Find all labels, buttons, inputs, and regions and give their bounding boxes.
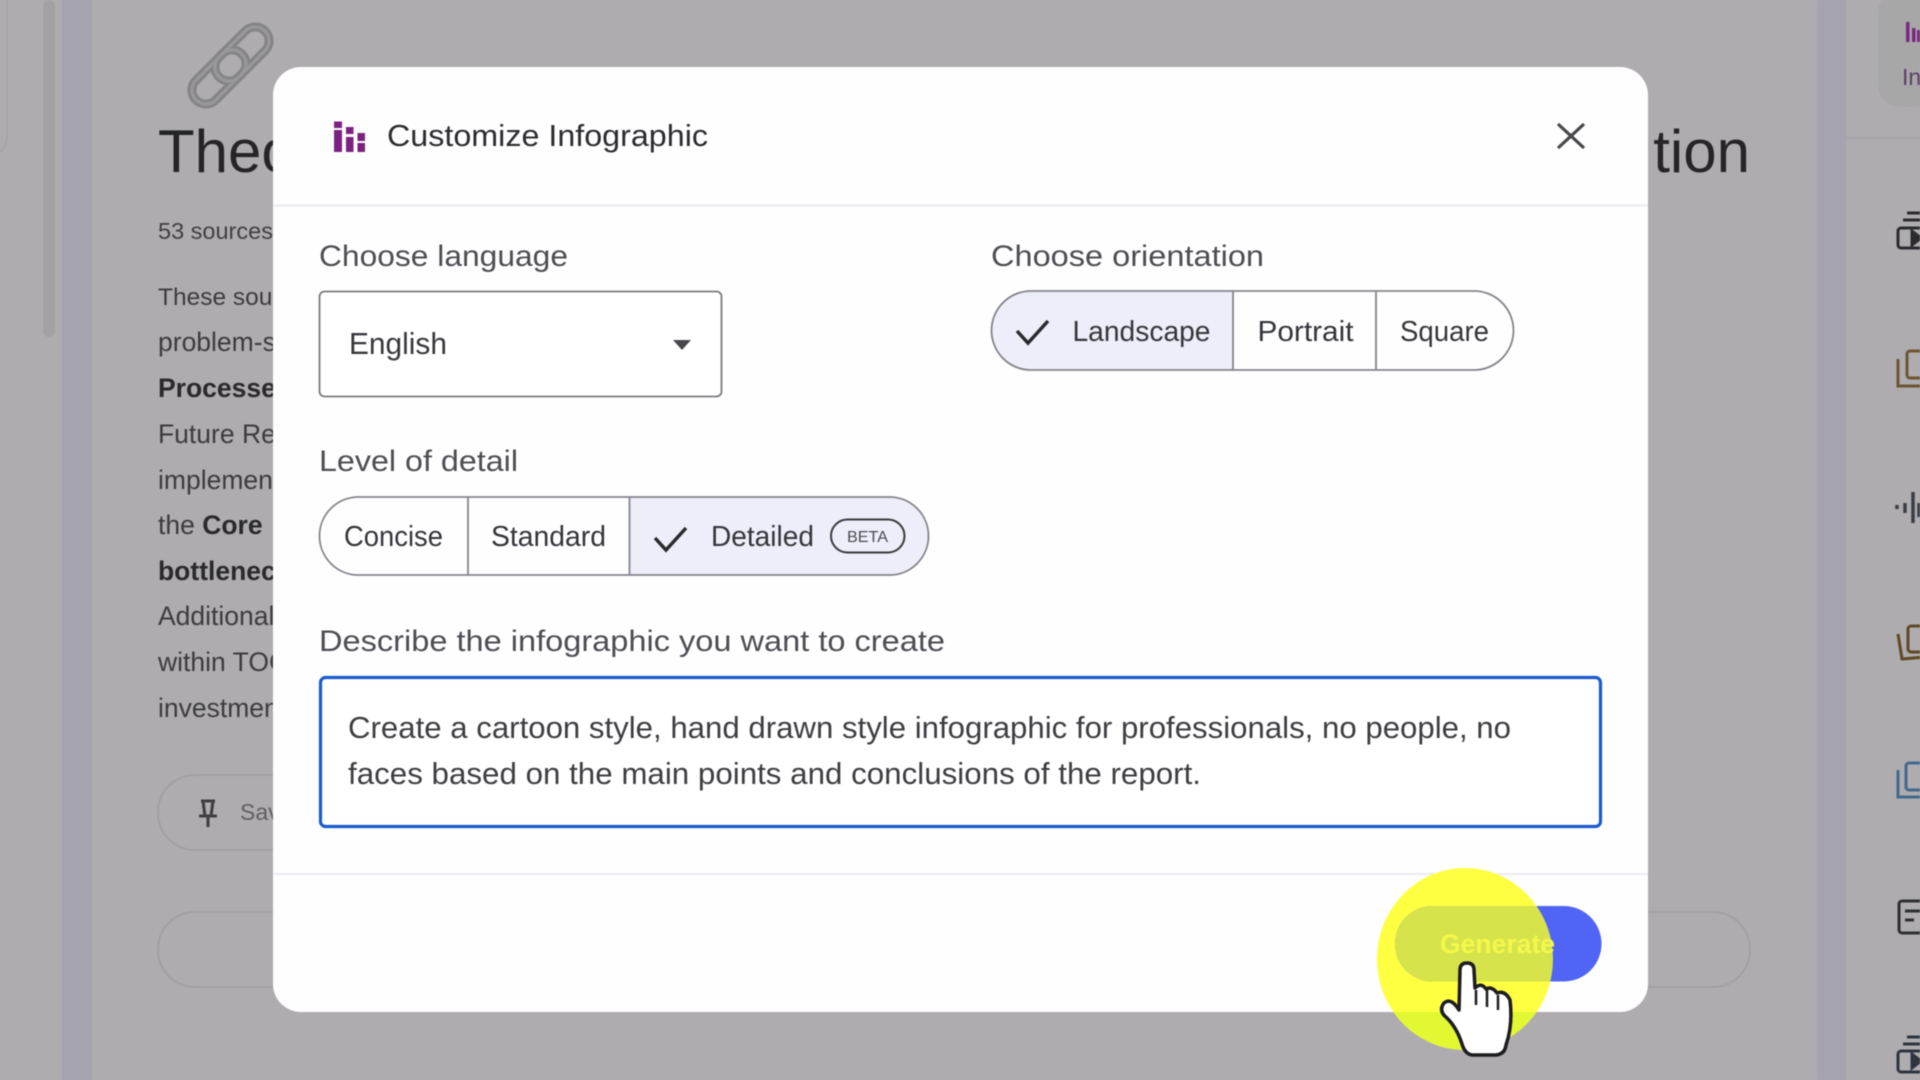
right rail: active infographic chip [1878,0,1920,107]
prompt text area: faces based on the main points and conclusions of the report. [348,757,1201,791]
icon: video overview lower [1898,1037,1920,1072]
prompt text area [320,678,1600,826]
level of detail segmented control: Standard [491,521,606,553]
icon: audio wave [1897,492,1919,523]
language select: English [349,327,447,361]
label: choose orientation: Choose orientation [991,240,1264,273]
prompt text area: Create a cartoon style, hand drawn style infographic for professionals, no people, no [348,711,1511,745]
background save pill button [158,775,458,850]
panel: customize infographic dialog [273,67,1648,1012]
background summary text: the Core [158,510,263,540]
background summary text: Additionally [158,601,294,631]
icon: chain link [186,21,275,110]
icon: copy blue [1898,763,1920,797]
background summary text: investment [158,693,287,723]
background summary text: problem-solving [158,327,345,357]
label: level of detail: Level of detail [319,445,518,478]
icon: infographic bars [334,122,365,152]
right rail tool icons [1897,213,1920,1072]
beta badge: BETA [847,529,889,546]
background summary text: implementing [158,465,316,495]
orientation segmented control [992,291,1514,370]
icon: copy tan [1898,626,1920,659]
background save pill button: Save [240,799,292,825]
highlight: yellow cursor spot [1377,868,1553,1050]
icon: hand cursor [1442,963,1511,1055]
orientation segmented control: Landscape [1072,316,1210,348]
icon: copy brown [1898,351,1920,386]
generate button: Generate [1440,929,1555,959]
orientation segmented control: Square [1400,316,1489,348]
background summary text: These sources [158,284,319,311]
language select [320,292,722,396]
background summary text: Future Research [158,419,355,449]
background summary text: within TOC [157,647,288,677]
background summary text: bottlenecks [158,556,305,586]
generate button [1395,906,1602,982]
background document title: Theory [158,118,345,185]
background document title [158,118,1750,185]
level of detail segmented control: Concise [344,521,443,553]
label: describe the infographic: Describe the infographic you want to create [319,625,945,658]
background document title: tion [1653,118,1750,185]
heading: Customize Infographic [387,119,708,153]
label: choose language: Choose language [319,240,568,273]
icon: close [1558,124,1584,148]
level of detail segmented control [320,497,929,575]
background input pill [158,912,1750,987]
background summary text: Processes [158,373,291,403]
level of detail segmented control: Detailed [711,521,814,553]
icon: video overview [1898,213,1920,248]
orientation segmented control: Portrait [1258,316,1354,348]
beta badge [831,520,904,552]
icon: report [1899,901,1920,933]
background summary text [157,284,355,723]
background source count: 53 sources [158,218,273,244]
